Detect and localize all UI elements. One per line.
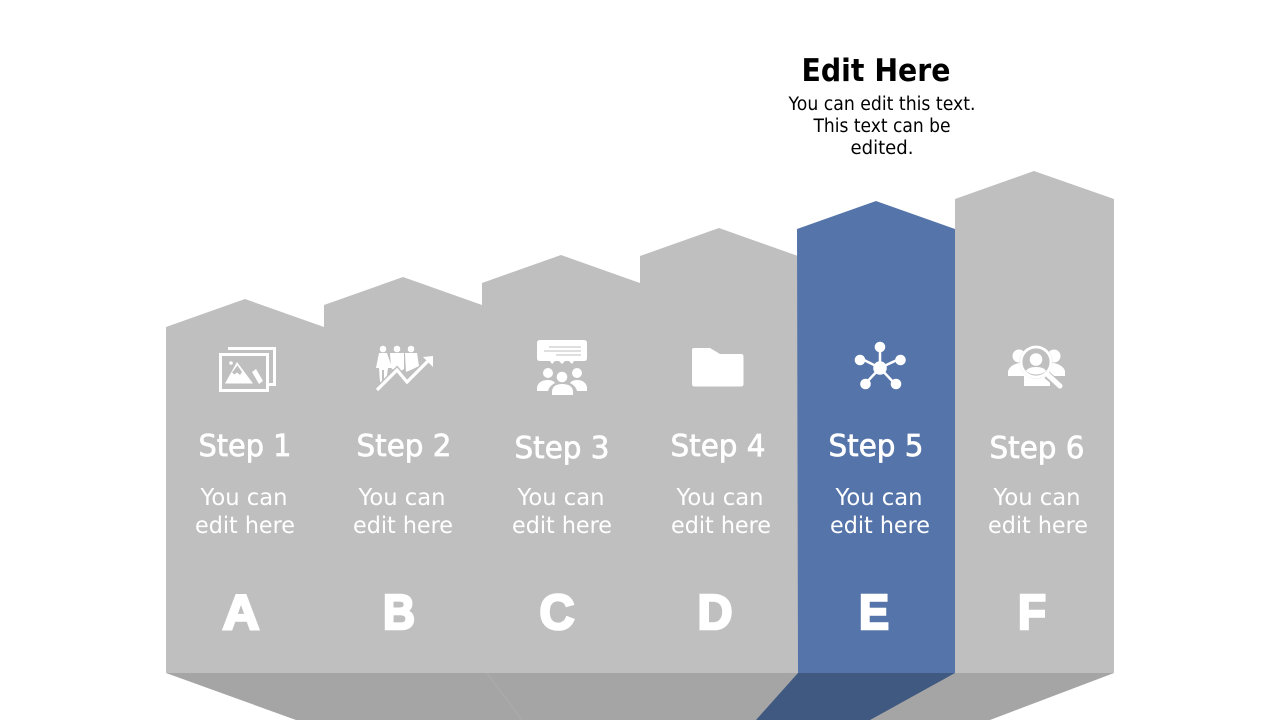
description: step 2: You can	[358, 485, 446, 511]
letter F: F	[1018, 586, 1046, 640]
panel: step 3	[482, 255, 640, 673]
icon: network hub	[855, 342, 906, 389]
description: step 1: You can	[200, 485, 288, 511]
label: step 3: Step 3	[514, 431, 610, 466]
description: step 4	[671, 485, 771, 539]
panel: step 2	[324, 277, 482, 673]
description: step 5	[830, 485, 930, 539]
floor shadow	[166, 673, 1114, 720]
description: step 5: You can	[835, 485, 922, 511]
icon: pictures	[220, 348, 274, 390]
panel: step 1	[166, 299, 324, 673]
label: step 1: Step 1	[198, 429, 292, 464]
callout: edit here: edited.	[850, 138, 914, 159]
callout: edit here: Edit Here	[802, 53, 950, 89]
letter B: B	[383, 586, 415, 640]
callout: edit here	[788, 53, 976, 159]
callout: edit here: This text can be	[813, 116, 950, 137]
description: step 3	[512, 485, 612, 539]
description: step 3: edit here	[512, 513, 612, 539]
description: step 1: edit here	[195, 513, 295, 539]
panel: step 4	[640, 228, 798, 673]
panel: step 5 highlighted	[797, 201, 955, 673]
icon: folder	[692, 348, 744, 386]
label: step 6: Step 6	[990, 431, 1084, 466]
letter D: D	[698, 586, 732, 640]
description: step 4: edit here	[671, 513, 771, 539]
description: step 6: edit here	[988, 513, 1088, 539]
description: step 2	[353, 485, 453, 539]
label: step 4: Step 4	[670, 429, 766, 464]
icon: people and rising arrow	[376, 346, 433, 390]
label: step 2: Step 2	[356, 429, 452, 464]
description: step 2: edit here	[353, 513, 453, 539]
icon: speech bubble and group	[537, 340, 587, 395]
description: step 6	[988, 485, 1088, 539]
description: step 5: edit here	[830, 513, 930, 539]
panel: step 6	[955, 171, 1114, 673]
description: step 1	[195, 485, 295, 539]
letter C: C	[540, 586, 574, 640]
callout: edit here: You can edit this text.	[788, 94, 976, 115]
label: step 5: Step 5	[828, 429, 924, 464]
letter A: A	[222, 586, 260, 640]
description: step 6: You can	[993, 485, 1080, 511]
description: step 3: You can	[517, 485, 604, 511]
letter E: E	[859, 586, 889, 640]
description: step 4: You can	[676, 485, 764, 511]
icon: magnified user group	[1008, 346, 1065, 386]
